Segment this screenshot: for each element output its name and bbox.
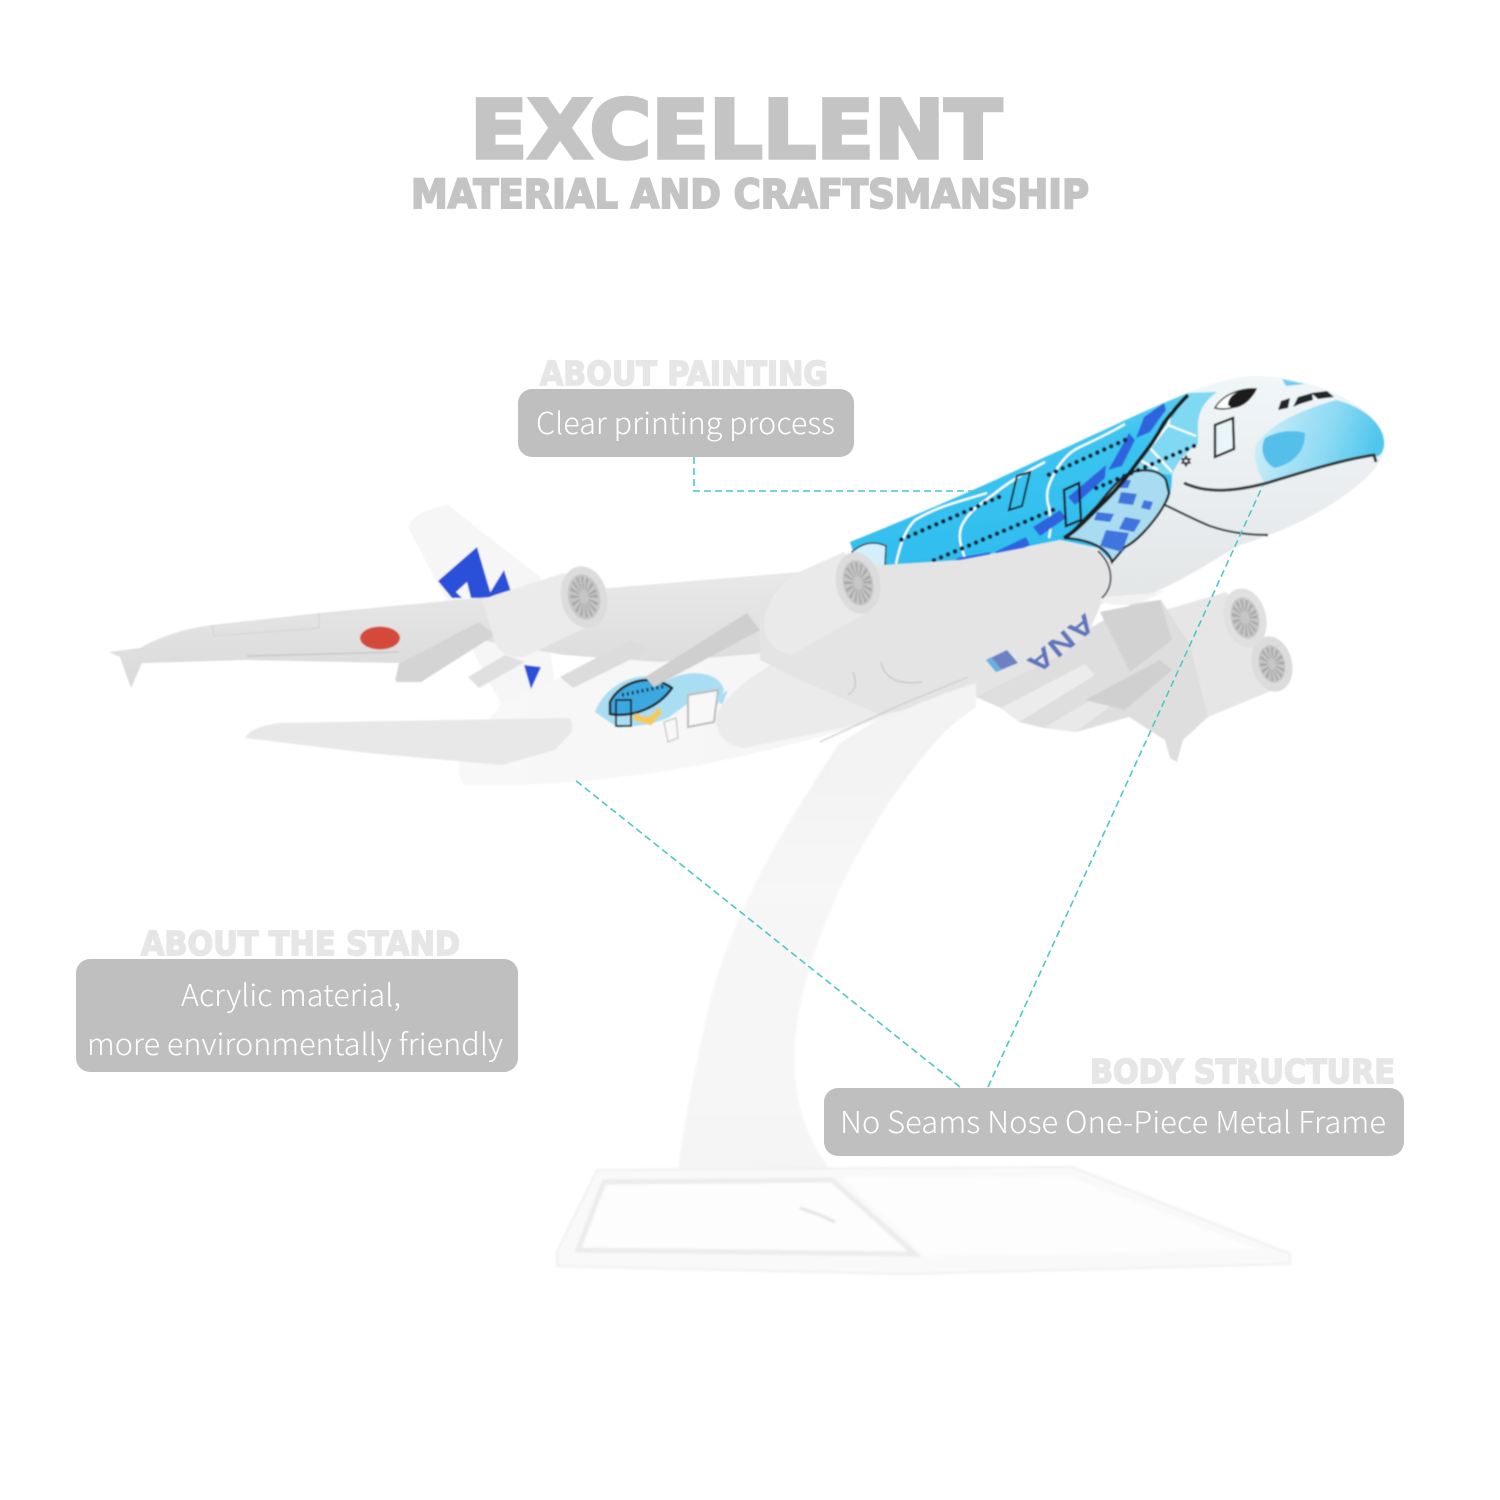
top cockpit blue mark: [1282, 379, 1305, 386]
callout: about the stand: [76, 924, 518, 1072]
callout: body structure: [824, 1052, 1404, 1156]
mouth lines: [1184, 455, 1376, 490]
outer engine nacelle: [482, 562, 613, 657]
flipper with tiles: [1066, 470, 1169, 562]
turtle decal on rear fuselage: [595, 673, 728, 742]
panel seams: [848, 662, 922, 695]
red sun emblem: [360, 626, 400, 650]
main fuselage: [850, 376, 1384, 604]
stand base plate: [557, 1167, 1290, 1274]
near wing and flap fairings: [976, 600, 1208, 762]
heading: BODY STRUCTURE: [1090, 1052, 1395, 1091]
heading: ABOUT PAINTING: [540, 354, 828, 393]
label text line 2: more environmentally friendly: [87, 1020, 503, 1064]
label text: Clear printing process: [536, 399, 835, 443]
mid doors: [1009, 472, 1030, 510]
label box: [76, 959, 518, 1072]
subtitle: material and craftsmanship: MATERIAL AND CRAFTSMANSHIP: [411, 172, 1089, 218]
wing root and inner engine: [760, 541, 1165, 742]
stand arch: [678, 700, 975, 1172]
aft turtle eye on fuselage: [852, 543, 886, 572]
airplane model: [109, 376, 1384, 785]
forward door: [1215, 418, 1234, 457]
leader line: stand to body: [575, 780, 960, 1087]
far wing: [109, 572, 800, 688]
ANA lettering: ANA: [1022, 607, 1101, 680]
stand cradle overlapping the belly: [826, 683, 976, 785]
far engines right side: [1165, 584, 1298, 717]
turtle livery blue shell: [850, 392, 1217, 572]
callout: about painting: [518, 354, 854, 457]
passenger window rows: [896, 440, 1194, 562]
neck scales: [1130, 392, 1217, 475]
flap fairings: [396, 622, 495, 682]
label box: [824, 1088, 1404, 1156]
belly rounded wing-root shadow: [716, 640, 1040, 748]
dark blue shell tiles: [955, 403, 1166, 564]
ANA blue block: [986, 650, 1018, 672]
inner engine nacelle: [764, 548, 886, 655]
title: EXCELLENT: EXCELLENT: [470, 84, 1002, 178]
label box: [518, 389, 854, 457]
blue nose cap: [1255, 400, 1384, 484]
nose blue patch: [1262, 431, 1305, 468]
eye: [1215, 389, 1256, 409]
black neck line: [1064, 395, 1188, 538]
leader line: nose to body: [988, 485, 1263, 1087]
cockpit windows: [1278, 391, 1334, 410]
rear fuselage: [459, 600, 1100, 785]
leader line: painting: [694, 457, 985, 491]
horizontal stabiliser: [245, 718, 572, 765]
turtle face: [1165, 379, 1384, 535]
label text: No Seams Nose One-Piece Metal Frame: [840, 1098, 1386, 1142]
star mark: [1182, 456, 1190, 466]
tail fin with ANA logo: [408, 505, 560, 720]
shell white outlines: [896, 410, 1196, 564]
heading: ABOUT THE STAND: [141, 924, 460, 963]
label text line 1: Acrylic material,: [181, 971, 401, 1015]
acrylic display stand: [557, 700, 1290, 1274]
